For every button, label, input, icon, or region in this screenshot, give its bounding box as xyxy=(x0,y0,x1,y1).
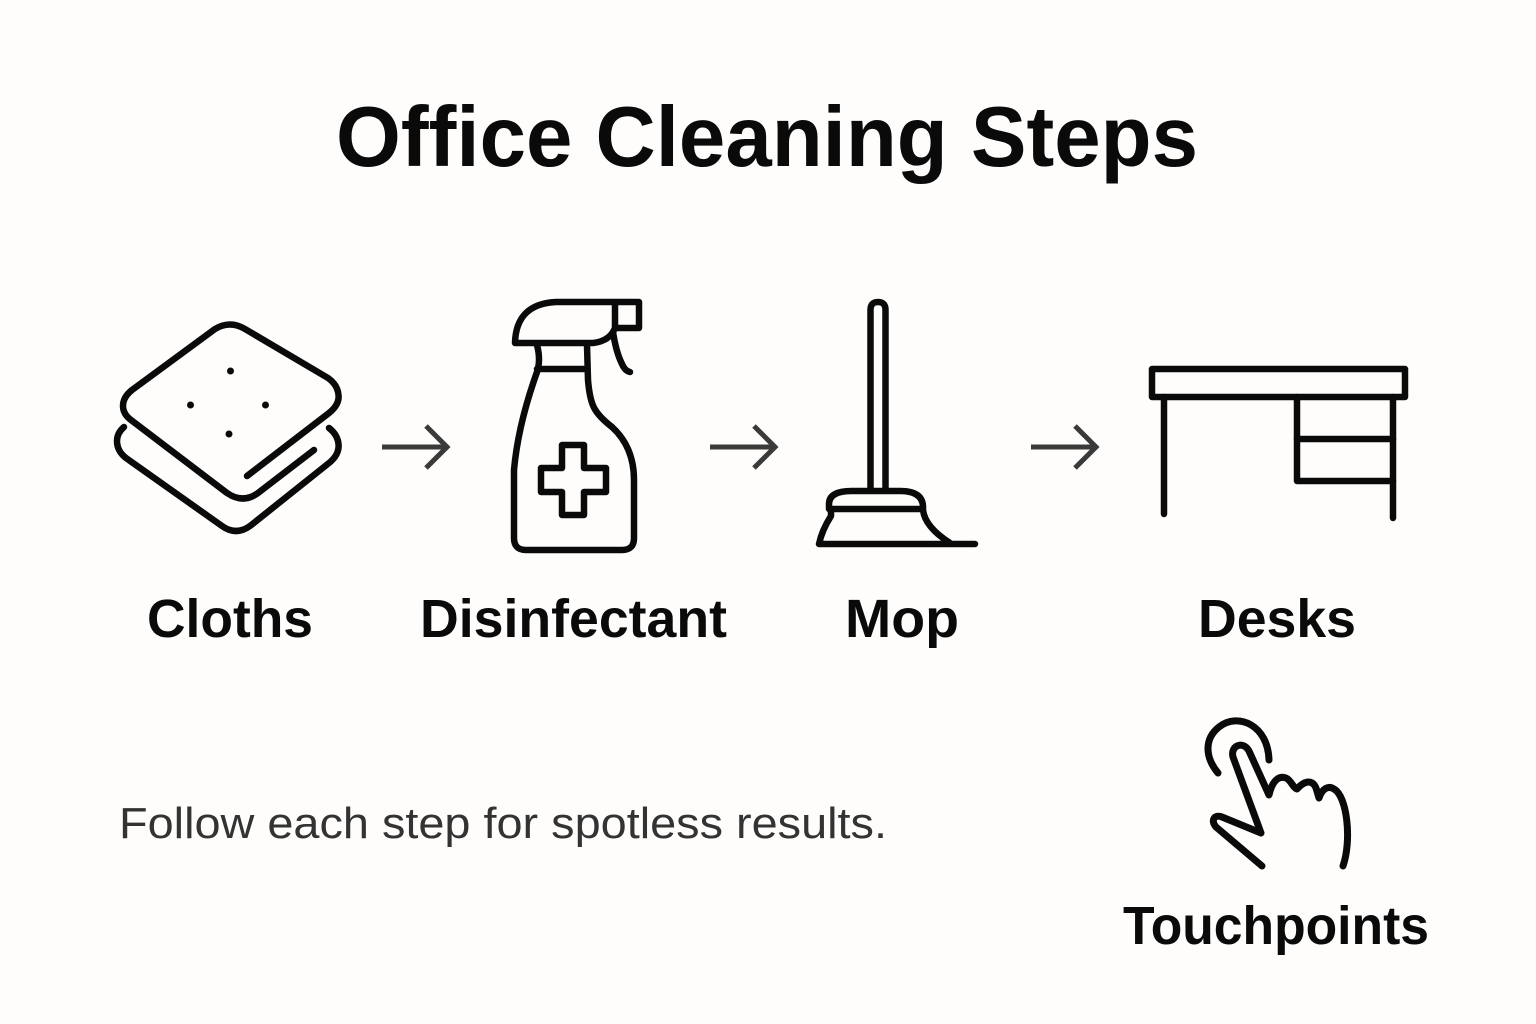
icon: touch hand xyxy=(1208,721,1348,866)
label: Desks: Desks xyxy=(1198,589,1356,649)
caption: Follow each step for spotless results. xyxy=(119,799,887,848)
label: Touchpoints: Touchpoints xyxy=(1123,896,1429,956)
arrow: disinfectant to mop xyxy=(710,426,775,468)
icon: cloths xyxy=(117,324,339,531)
label: Cloths: Cloths xyxy=(147,589,313,649)
title: Office Cleaning Steps xyxy=(336,90,1198,185)
label: Mop: Mop xyxy=(845,589,959,649)
arrow: cloths to disinfectant xyxy=(382,426,447,468)
icon: spray bottle xyxy=(514,302,639,550)
arrow: mop to desks xyxy=(1031,426,1096,468)
label: Disinfectant: Disinfectant xyxy=(420,589,727,649)
icon: desk xyxy=(1152,369,1405,518)
icon: mop xyxy=(819,302,975,544)
